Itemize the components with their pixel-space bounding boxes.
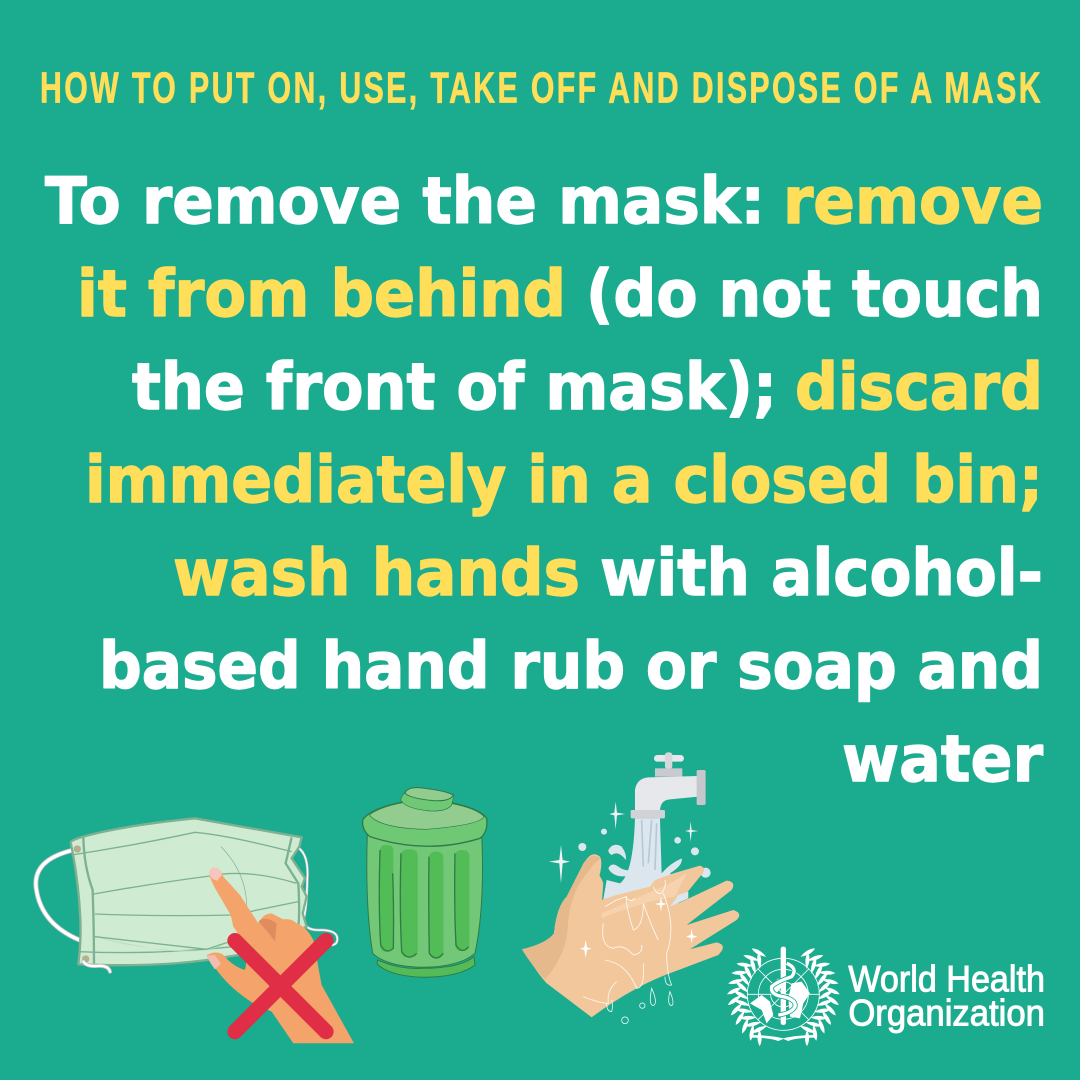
logo wordmark: World Health	[848, 958, 1045, 1000]
main instruction text: discard	[795, 351, 1043, 425]
main instruction text: water	[842, 723, 1043, 797]
hand pointing at the mask	[207, 868, 354, 1043]
logo wordmark: Organization	[848, 992, 1045, 1034]
main instruction text: To remove the mask:	[45, 165, 765, 239]
main instruction text: remove	[783, 165, 1043, 239]
logo wordmark	[848, 958, 1045, 1034]
main instruction text: immediately in a closed bin;	[85, 444, 1043, 518]
main instruction text: the front of mask);	[132, 351, 777, 425]
main instruction text: (do not touch	[586, 258, 1043, 332]
hands	[522, 854, 739, 1017]
tap	[631, 752, 706, 818]
main instruction text	[45, 165, 1043, 797]
logo: World Health Organization	[726, 947, 1045, 1046]
icon: closed green bin	[363, 787, 487, 977]
water trails and sparkles	[583, 880, 673, 1024]
main instruction text: it from behind	[77, 258, 566, 332]
water	[578, 818, 711, 907]
main instruction text: with alcohol-	[600, 537, 1043, 611]
main instruction text: wash hands	[173, 537, 580, 611]
icon: hands washing under a tap	[522, 752, 739, 1024]
icon: surgical mask with crossed-out hand	[36, 818, 354, 1043]
red cross	[235, 941, 326, 1032]
emblem wreath and globe	[726, 947, 841, 1046]
